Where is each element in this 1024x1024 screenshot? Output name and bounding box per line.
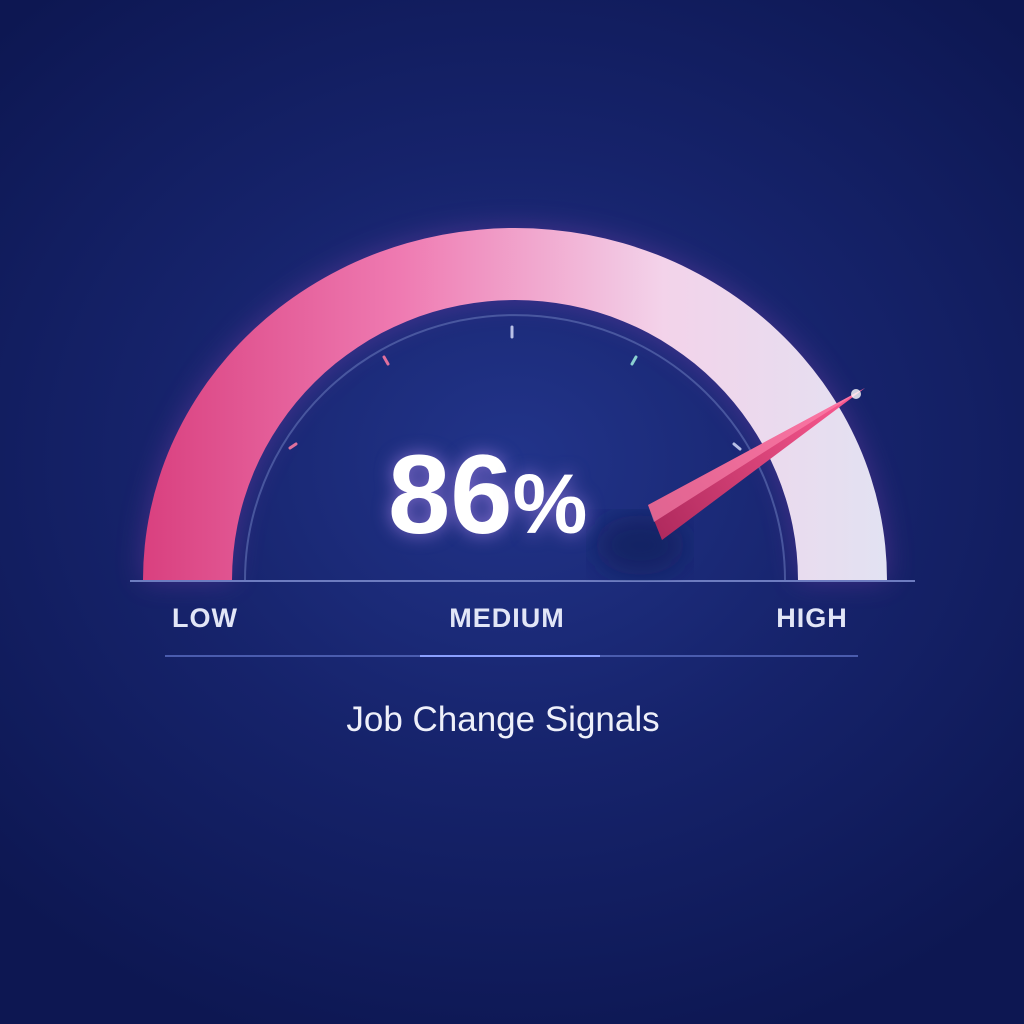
baseline: [130, 580, 915, 582]
bottom line: [165, 655, 858, 657]
label high: HIGH: [776, 603, 848, 633]
value: 86%: [388, 432, 587, 557]
arc band: [143, 228, 887, 580]
caption: Job Change Signals: [346, 700, 660, 739]
needle: [595, 388, 865, 575]
ticks: [290, 327, 740, 449]
glow: [143, 228, 887, 580]
label low: LOW: [172, 603, 238, 633]
inner ring: [245, 315, 785, 580]
label medium: MEDIUM: [449, 603, 565, 633]
